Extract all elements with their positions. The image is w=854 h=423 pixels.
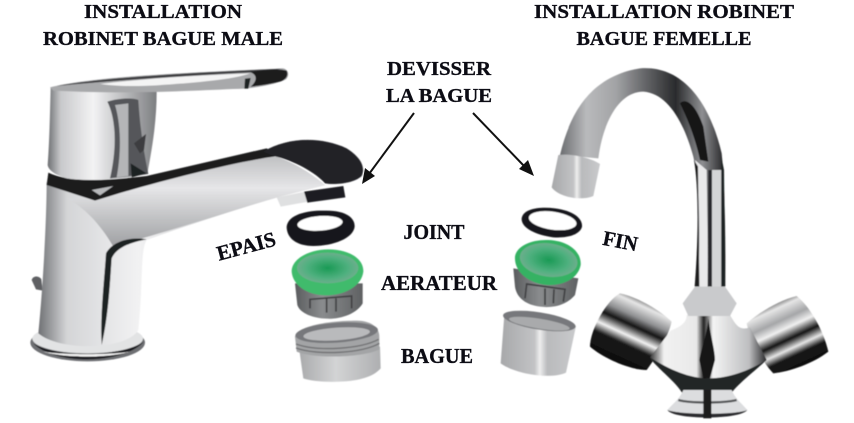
male basin faucet <box>30 68 363 361</box>
title: right installation <box>534 1 795 50</box>
female faucet parts <box>501 208 582 376</box>
thin black gasket <box>522 208 582 238</box>
smooth female ring <box>501 307 577 376</box>
label: devisser la bague: LA BAGUE <box>386 85 492 107</box>
label: devisser la bague: DEVISSER <box>387 58 492 80</box>
right cross handle <box>747 296 828 373</box>
swan-neck spout <box>560 68 725 287</box>
foot <box>667 390 747 418</box>
label: fin: FIN <box>601 226 640 256</box>
head recess <box>107 98 148 178</box>
left cross handle <box>590 293 672 370</box>
title: left installation: INSTALLATION <box>84 1 243 23</box>
lever handle <box>50 68 288 92</box>
threaded male ring <box>295 320 381 382</box>
spout black top <box>263 140 363 184</box>
faucet body and spout <box>38 157 325 346</box>
base ring <box>30 324 145 361</box>
central body <box>650 315 767 395</box>
label: bague: BAGUE <box>401 344 473 368</box>
female pillar faucet <box>552 68 828 418</box>
title: left installation: ROBINET BAGUE MALE <box>43 28 283 50</box>
thick black gasket <box>287 211 355 246</box>
label: joint: JOINT <box>404 220 464 244</box>
arrow: to female faucet nozzle <box>473 113 534 176</box>
pop-up rod <box>32 277 43 291</box>
label: devisser la bague <box>386 58 492 107</box>
green aerator <box>292 249 363 319</box>
male faucet parts <box>287 211 381 382</box>
nozzle <box>277 186 345 207</box>
arrow: to male faucet nozzle <box>362 113 414 184</box>
green aerator <box>513 239 581 307</box>
title: right installation: INSTALLATION ROBINET <box>534 1 795 23</box>
mixer head <box>48 87 157 180</box>
spout tip <box>552 155 600 198</box>
title: left installation <box>43 1 283 50</box>
title: right installation: BAGUE FEMELLE <box>576 28 752 50</box>
label: aerateur: AERATEUR <box>381 271 498 295</box>
label: epais: EPAIS <box>214 227 278 266</box>
collar nut <box>683 287 737 316</box>
